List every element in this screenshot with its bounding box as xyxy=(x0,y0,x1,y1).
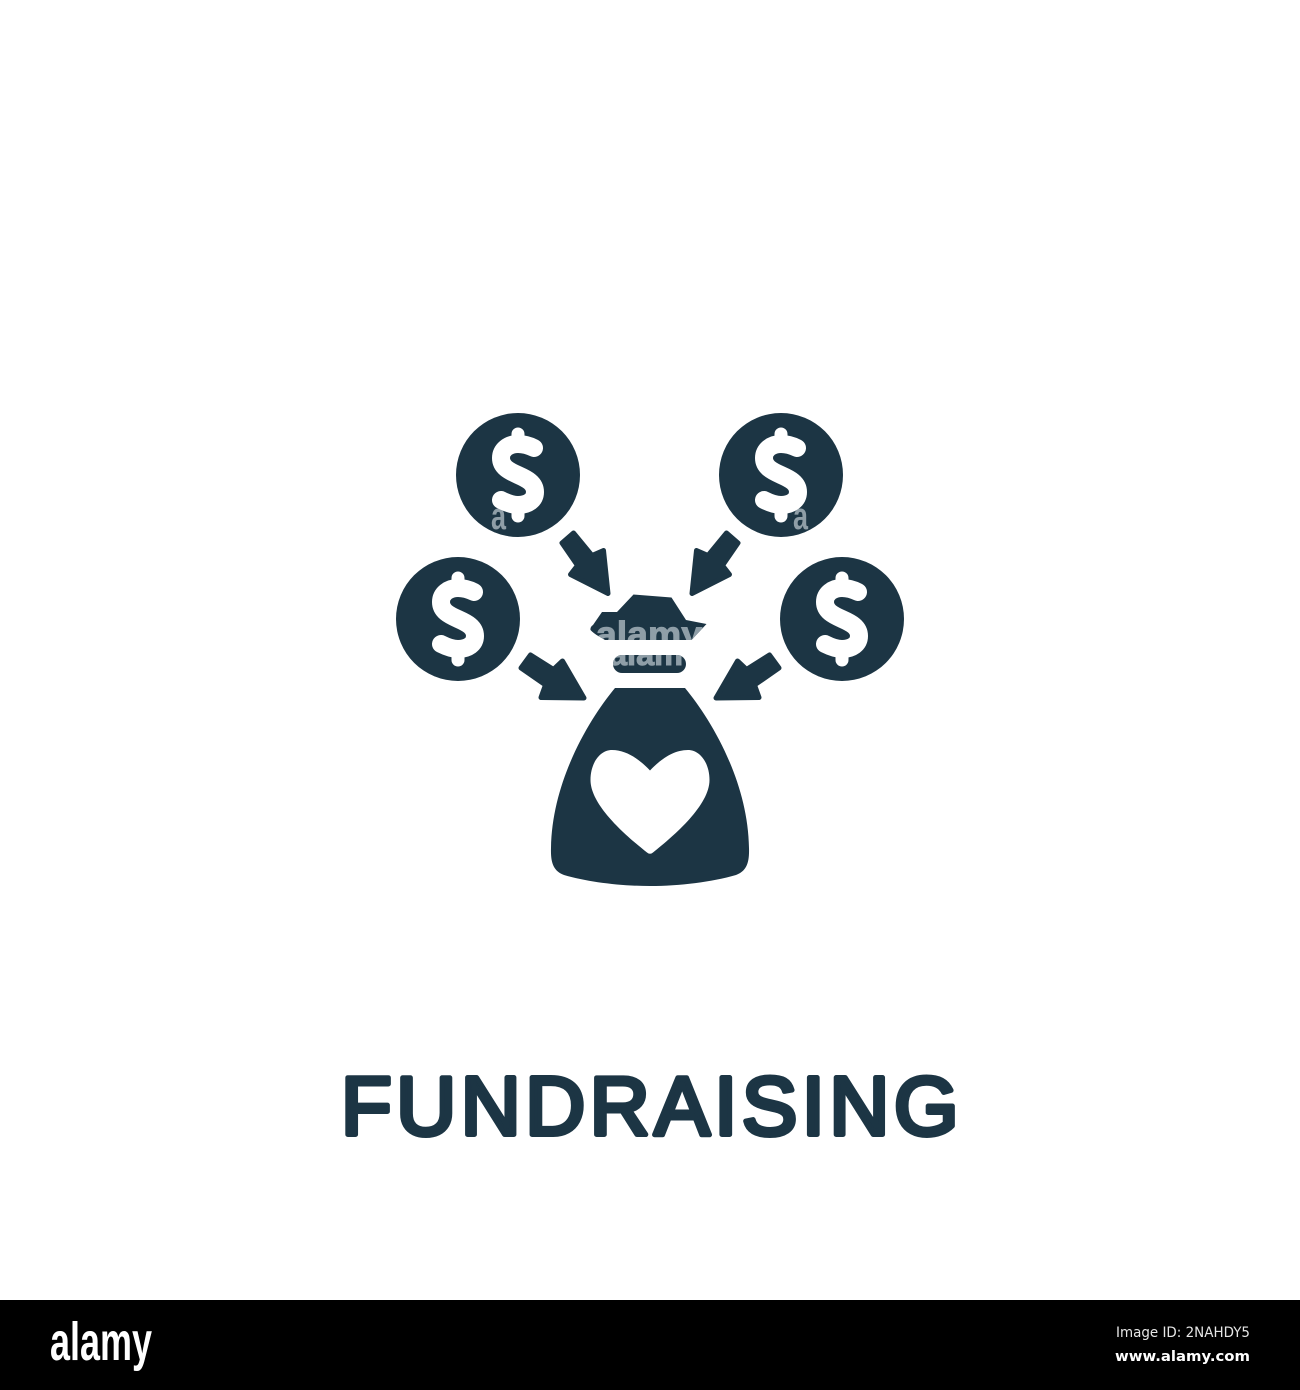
icon: money bag top knot xyxy=(590,594,706,640)
icon: money bag body with heart xyxy=(551,688,749,886)
footer logo: alamy xyxy=(50,1312,152,1372)
icon: dollar coin right xyxy=(780,557,904,681)
title: FUNDRAISING xyxy=(341,1060,958,1152)
watermark over top right coin: a xyxy=(793,496,809,538)
infographic canvas xyxy=(0,413,1300,1390)
icon: dollar coin top left xyxy=(456,413,580,538)
watermark over top left coin: a xyxy=(491,496,507,538)
icon: dollar coin top right xyxy=(719,413,843,538)
footer bar xyxy=(0,1300,1300,1390)
arrow: left coin to bag xyxy=(521,655,584,698)
icon: dollar coin left xyxy=(396,557,520,681)
arrow: top left coin to bag xyxy=(562,533,608,594)
watermark over knot: alamy xyxy=(596,615,703,654)
arrow: right coin to bag xyxy=(716,655,779,698)
watermark over tie: alam xyxy=(609,636,683,672)
arrow: top right coin to bag xyxy=(692,533,738,594)
icon: fundraising coins, arrows and money bag xyxy=(396,413,904,886)
image id: Image ID: 2NAHDY5 xyxy=(1116,1325,1250,1341)
icon: money bag tie xyxy=(613,655,686,673)
website: www.alamy.com xyxy=(1115,1349,1250,1365)
